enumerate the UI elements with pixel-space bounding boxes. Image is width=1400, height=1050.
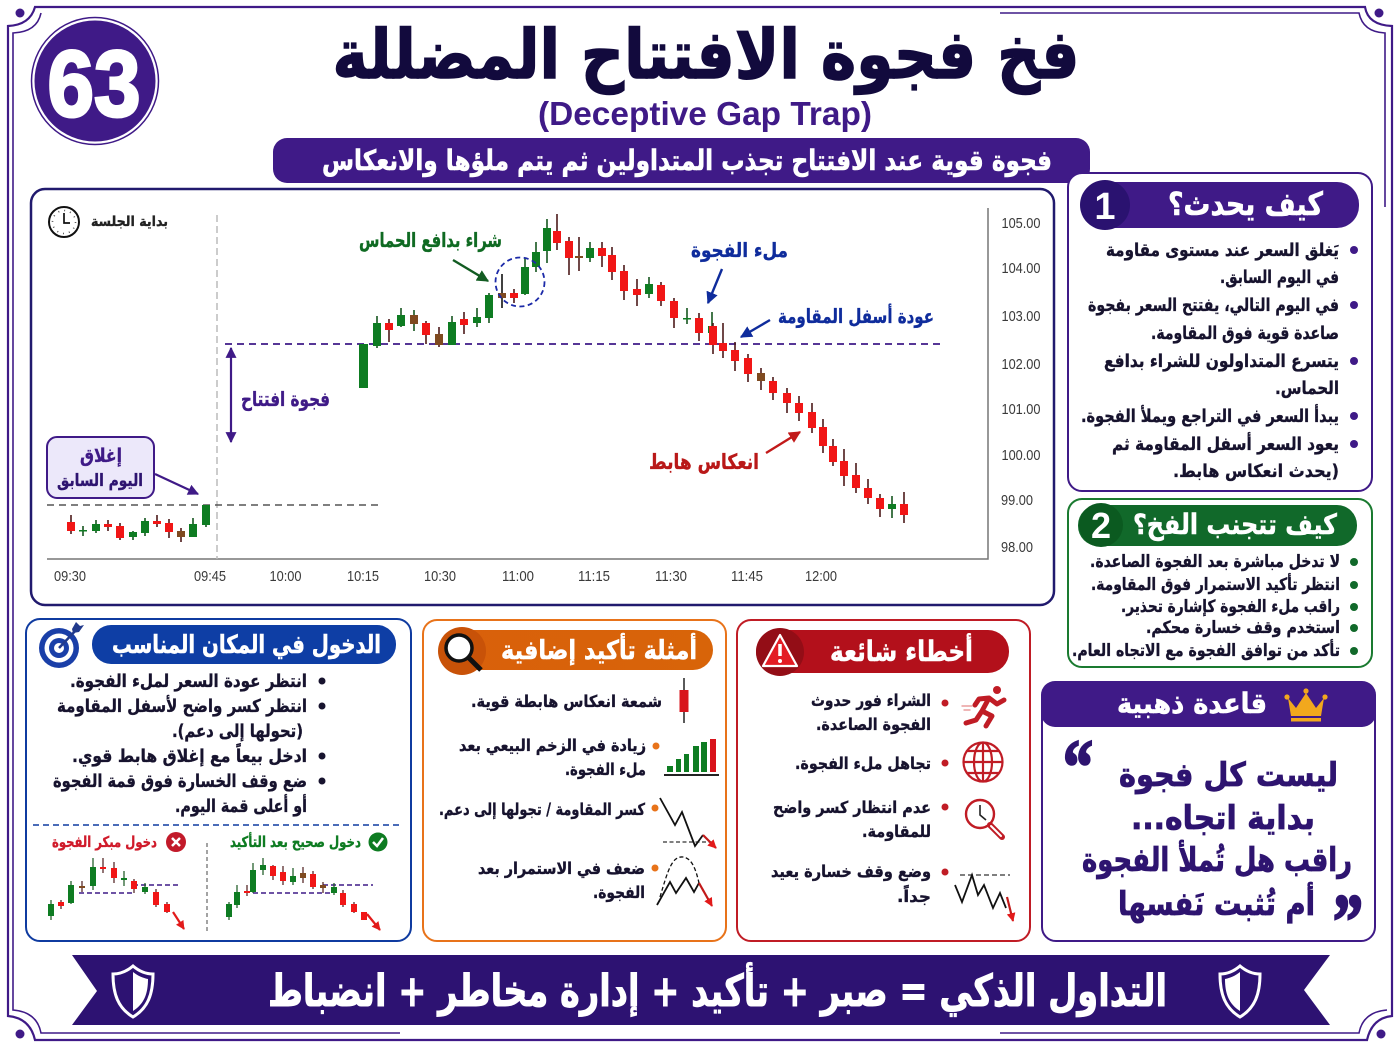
icon: session clock (49, 207, 79, 237)
item: no clear break: للمقاومة. (862, 822, 931, 842)
subtitle banner (273, 138, 1090, 183)
list: how it happens: في اليوم التالي، يفتتح السعر بفجوة (1088, 295, 1339, 316)
list: right entry: انتظر عودة السعر لملء الفجوة. (70, 671, 307, 692)
list: how it happens: يبدأ السعر في التراجع ويملأ الفجوة. (1081, 404, 1339, 427)
list: how to avoid the trap (1072, 552, 1358, 661)
heading: right entry: الدخول في المكان المناسب (112, 630, 381, 660)
icon: magnifier (438, 627, 486, 675)
y axis labels: 101.00 (1002, 401, 1040, 418)
list: right entry (53, 671, 326, 817)
back below resistance label: عودة أسفل المقاومة (778, 304, 934, 328)
item: distant stop loss: وضع وقف خسارة يعيد (771, 862, 931, 882)
arrow: gap size (230, 348, 232, 442)
bottom ribbon (72, 955, 1330, 1025)
panel: golden rule (1041, 681, 1376, 964)
golden rule quote: ليست كل فجوة (1119, 755, 1338, 795)
item: buying right after gap: الشراء فور حدوث (811, 691, 931, 711)
list: how it happens (1081, 240, 1358, 482)
opening quote mark: “ (1063, 725, 1093, 809)
y axis labels (1001, 215, 1040, 556)
y axis labels: 105.00 (1002, 215, 1040, 232)
number badge: 63 (48, 31, 140, 136)
correct entry label: دخول صحيح بعد التأكيد (230, 832, 361, 851)
y axis labels: 100.00 (1002, 447, 1040, 464)
list: right entry: ضع وقف الخسارة فوق قمة الفجوة (53, 771, 307, 792)
enthusiasm buying label: شراء بدافع الحماس (359, 228, 502, 252)
title: فخ فجوة الافتتاح المضللة (332, 16, 1080, 95)
x axis labels: 10:30 (424, 568, 456, 585)
heading: how it happens (1080, 180, 1359, 230)
icon: clock magnifier (966, 800, 1002, 837)
list: how it happens: يَغلق السعر عند مستوى مقاومة (1106, 240, 1339, 261)
icon: crown (1284, 688, 1328, 722)
gap fill label: ملء الفجوة (691, 238, 788, 262)
callout: previous close: اليوم السابق (57, 471, 143, 491)
golden rule quote: أم تُثبت نَفسها (1118, 882, 1315, 924)
item: distant stop loss (771, 862, 1013, 921)
y axis labels: 99.00 (1001, 492, 1033, 509)
y axis labels: 102.00 (1002, 356, 1040, 373)
item: strong reversal candle: شمعة انعكاس هابطة قوية. (471, 692, 662, 712)
golden rule quote: بداية اتجاه... (1131, 798, 1315, 837)
opening gap label: فجوة افتتاح (241, 387, 330, 411)
item: weak continuation (478, 857, 712, 906)
mini chart: early entry (48, 858, 184, 929)
y axis labels: 103.00 (1002, 308, 1040, 325)
x axis labels: 11:45 (731, 568, 763, 585)
candlesticks (67, 214, 908, 542)
y axis labels: 104.00 (1002, 260, 1040, 277)
x axis labels: 11:15 (578, 568, 610, 585)
item: buying right after gap (811, 686, 1004, 735)
list: how it happens: في اليوم السابق. (1220, 267, 1339, 288)
panel: common mistakes (737, 620, 1030, 941)
list: right entry: أو أعلى قمة اليوم. (175, 794, 307, 817)
panel: price chart (31, 189, 1054, 605)
arrow: below resistance (741, 320, 770, 337)
x axis labels: 11:30 (655, 568, 687, 585)
x axis labels: 12:00 (805, 568, 837, 585)
item: ignoring gap fill (795, 742, 1002, 782)
item: ignoring gap fill: تجاهل ملء الفجوة. (795, 754, 931, 774)
x axis labels: 10:00 (270, 568, 302, 585)
arrow: to previous close (155, 474, 198, 494)
panel: how it happens (1068, 173, 1372, 491)
list: right entry: انتظر كسر واضح لأسفل المقاومة (57, 695, 307, 717)
list: how to avoid the trap: لا تدخل مباشرة بعد الفجوة الصاعدة. (1090, 552, 1340, 572)
closing quote mark: ” (1333, 880, 1363, 964)
list: how to avoid the trap: تأكد من توافق الفجوة مع الاتجاه العام. (1072, 639, 1340, 661)
icon: warning (756, 628, 804, 676)
callout: previous close (47, 437, 154, 498)
session start label: بداية الجلسة (91, 214, 168, 230)
list: how it happens: يتسرع المتداولون للشراء بدافع (1104, 351, 1339, 372)
item: weak continuation: الفجوة. (593, 883, 645, 903)
list: how it happens: الحماس. (1275, 378, 1339, 399)
x axis labels: 10:15 (347, 568, 379, 585)
subtitle: (Deceptive Gap Trap) (538, 95, 872, 132)
heading: common mistakes: أخطاء شائعة (830, 633, 973, 668)
x axis labels (54, 568, 837, 585)
subtitle banner: فجوة قوية عند الافتتاح تجذب المتداولين ثم يتم ملؤها والانعكاس (322, 144, 1052, 177)
icon: left shield (113, 966, 153, 1017)
list: how it happens: (يحدث انعكاس هابط. (1173, 461, 1339, 482)
item: no clear break (773, 798, 1002, 842)
item: weak continuation: ضعف في الاستمرار بعد (478, 859, 645, 879)
panel: how to avoid the trap (1068, 499, 1372, 667)
heading: how to avoid the trap (1078, 503, 1357, 547)
x axis labels: 09:30 (54, 568, 86, 585)
item: resistance break (439, 798, 716, 848)
arrow: bearish reversal (766, 432, 800, 453)
item: selling momentum (459, 736, 719, 780)
golden rule quote (1082, 755, 1352, 924)
item: resistance break: كسر المقاومة / تجولها إلى دعم. (439, 800, 645, 820)
list: how to avoid the trap: استخدم وقف خسارة محكم. (1146, 618, 1340, 638)
arrow: to enthusiasm buying (453, 260, 488, 281)
list: how to avoid the trap: راقب ملء الفجوة كإشارة تحذير. (1121, 597, 1340, 617)
mini chart: correct entry (226, 858, 380, 930)
list: how it happens: يعود السعر أسفل المقاومة ثم (1112, 432, 1339, 455)
panel: right entry (26, 619, 411, 941)
dashed circle highlight (496, 258, 544, 306)
item: distant stop loss: جداً. (897, 884, 931, 906)
item: no clear break: عدم انتظار كسر واضح (773, 798, 931, 818)
icon: target (39, 622, 84, 668)
icon: globe (964, 742, 1002, 782)
item: selling momentum: زيادة في الزخم البيعي بعد (459, 736, 646, 756)
heading: additional confirmation (440, 630, 713, 670)
chart axes and guide lines (47, 208, 988, 559)
panel: additional confirmation (423, 620, 726, 941)
icon: right shield (1220, 966, 1260, 1017)
list: how it happens: صاعدة قوية فوق المقاومة. (1151, 323, 1339, 344)
heading: golden rule (1041, 681, 1376, 727)
heading: how to avoid the trap: 2 (1091, 505, 1111, 546)
bearish reversal label: انعكاس هابط (649, 450, 759, 474)
list: right entry: (تحولها إلى دعم). (172, 721, 303, 742)
heading: how it happens: 1 (1094, 186, 1116, 228)
item: selling momentum: ملء الفجوة. (565, 760, 646, 780)
heading: how it happens: كيف يحدث؟ (1168, 185, 1323, 223)
list: how to avoid the trap: انتظر تأكيد الاستمرار فوق المقاومة. (1091, 573, 1340, 595)
item: buying right after gap: الفجوة الصاعدة. (816, 715, 931, 735)
number badge (32, 18, 158, 144)
callout: previous close: إغلاق (80, 445, 122, 467)
x axis labels: 11:00 (502, 568, 534, 585)
item: strong reversal candle (471, 678, 688, 723)
heading: right entry (92, 625, 396, 664)
x axis labels: 09:45 (194, 568, 226, 585)
icon: runner (962, 686, 1004, 726)
list: right entry: ادخل بيعاً مع إغلاق هابط قوي. (72, 743, 307, 767)
heading: golden rule: قاعدة ذهبية (1117, 687, 1267, 720)
y axis labels: 98.00 (1001, 539, 1033, 556)
early entry label: دخول مبكر الفجوة (52, 833, 157, 851)
heading: how to avoid the trap: كيف تتجنب الفخ؟ (1133, 508, 1338, 541)
heading: additional confirmation: أمثلة تأكيد إضافية (501, 633, 697, 666)
arrow: gap fill (708, 269, 722, 303)
heading: common mistakes (756, 630, 1009, 673)
